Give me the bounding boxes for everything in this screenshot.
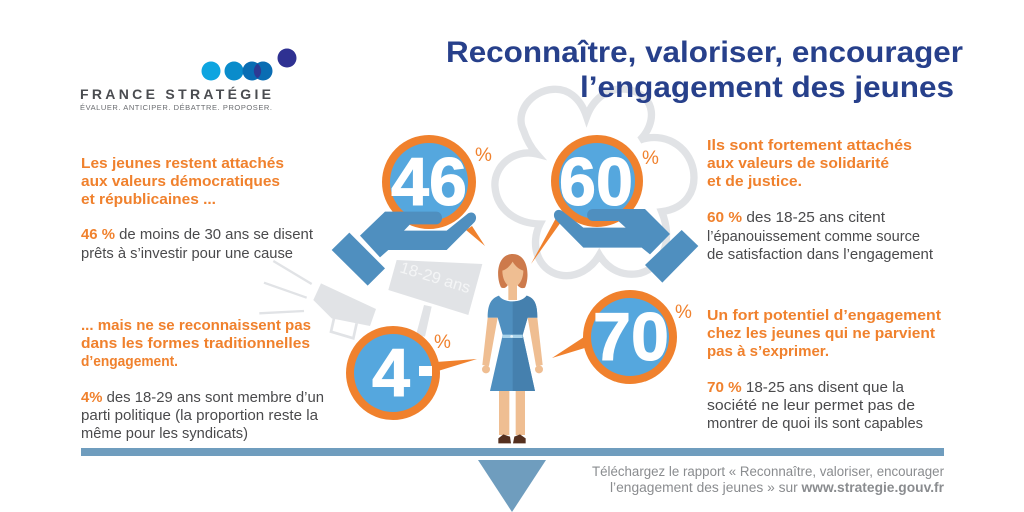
callout: 4 %: % — [434, 332, 451, 353]
text block: solidarité: l’épanouissement comme source — [707, 228, 920, 245]
text block: fort potentiel: pas à s’exprimer. — [707, 343, 829, 360]
text block: solidarité: Ils sont fortement attachés — [707, 137, 912, 154]
footer text: Téléchargez le rapport « Reconnaître, valoriser, encourager — [592, 464, 944, 479]
callout: 70 %: 70 — [593, 299, 669, 375]
text block: démocratiques: et républicaines ... — [81, 191, 216, 208]
footer text — [592, 464, 945, 495]
footer text: l’engagement des jeunes » sur www.strategie.gouv.fr — [610, 480, 945, 495]
text block: fort potentiel: société ne leur permet pas de — [707, 397, 915, 414]
callout: 4 %: 4 — [372, 335, 410, 411]
text block: formes traditionnelles: ... mais ne se reconnaissent pas — [81, 317, 311, 334]
text block: fort potentiel: chez les jeunes qui ne parvient — [707, 325, 935, 342]
text block: démocratiques: 46 % de moins de 30 ans se disent — [81, 226, 314, 243]
callout: 46 % — [386, 139, 492, 246]
text block: formes traditionnelles: dans les formes traditionnelles — [81, 335, 310, 352]
text block: fort potentiel — [707, 307, 941, 432]
text block: fort potentiel: montrer de quoi ils sont capables — [707, 415, 923, 432]
icon: woman — [482, 254, 543, 443]
callout: 46 %: % — [475, 145, 492, 166]
icon: grey flower outline — [495, 89, 694, 276]
callout: 4 % — [350, 330, 477, 416]
text block: démocratiques: aux valeurs démocratiques — [81, 173, 280, 190]
text block: démocratiques: Les jeunes restent attachés — [81, 155, 284, 172]
icon: left hand — [332, 212, 476, 286]
text block: démocratiques: prêts à s’investir pour une cause — [81, 245, 293, 262]
text block: fort potentiel: 70 % 18-25 ans disent que la — [707, 379, 905, 396]
title — [446, 36, 963, 104]
text block: solidarité: 60 % des 18-25 ans citent — [707, 209, 886, 226]
text block: formes traditionnelles: même pour les syndicats) — [81, 425, 248, 442]
text block: formes traditionnelles: 4% des 18-29 ans sont membre d’un — [81, 389, 324, 406]
text block: solidarité: aux valeurs de solidarité — [707, 155, 889, 172]
divider bar — [81, 448, 944, 456]
text block: démocratiques — [81, 155, 314, 262]
text block: solidarité — [707, 137, 934, 263]
text block: formes traditionnelles: d’engagement. — [81, 353, 178, 370]
title: l’engagement des jeunes — [580, 71, 954, 104]
logo: France Stratégie: ÉVALUER. ANTICIPER. DÉBATTRE. PROPOSER. — [80, 103, 272, 112]
callout: 70 % — [552, 294, 692, 380]
logo: France Stratégie — [80, 48, 296, 112]
icon: megaphone and sign — [259, 260, 482, 338]
icon: megaphone and sign: 18-29 ans — [398, 260, 472, 297]
callout: 46 %: 46 — [391, 144, 467, 220]
text block: fort potentiel: Un fort potentiel d’engagement — [707, 307, 941, 324]
text block: solidarité: de satisfaction dans l’engagement — [707, 246, 934, 263]
callout: 60 % — [531, 139, 659, 264]
icon: down triangle — [478, 460, 546, 512]
callout: 70 %: % — [675, 302, 692, 323]
text block: formes traditionnelles — [81, 317, 324, 442]
callout: 60 %: 60 — [559, 144, 633, 220]
title: Reconnaître, valoriser, encourager — [446, 36, 963, 69]
text block: formes traditionnelles: parti politique (la proportion reste la — [81, 407, 319, 424]
logo: France Stratégie: FRANCE STRATÉGIE — [80, 86, 271, 102]
callout: 60 %: % — [642, 148, 659, 169]
text block: solidarité: et de justice. — [707, 173, 802, 190]
icon: right hand — [554, 209, 698, 283]
